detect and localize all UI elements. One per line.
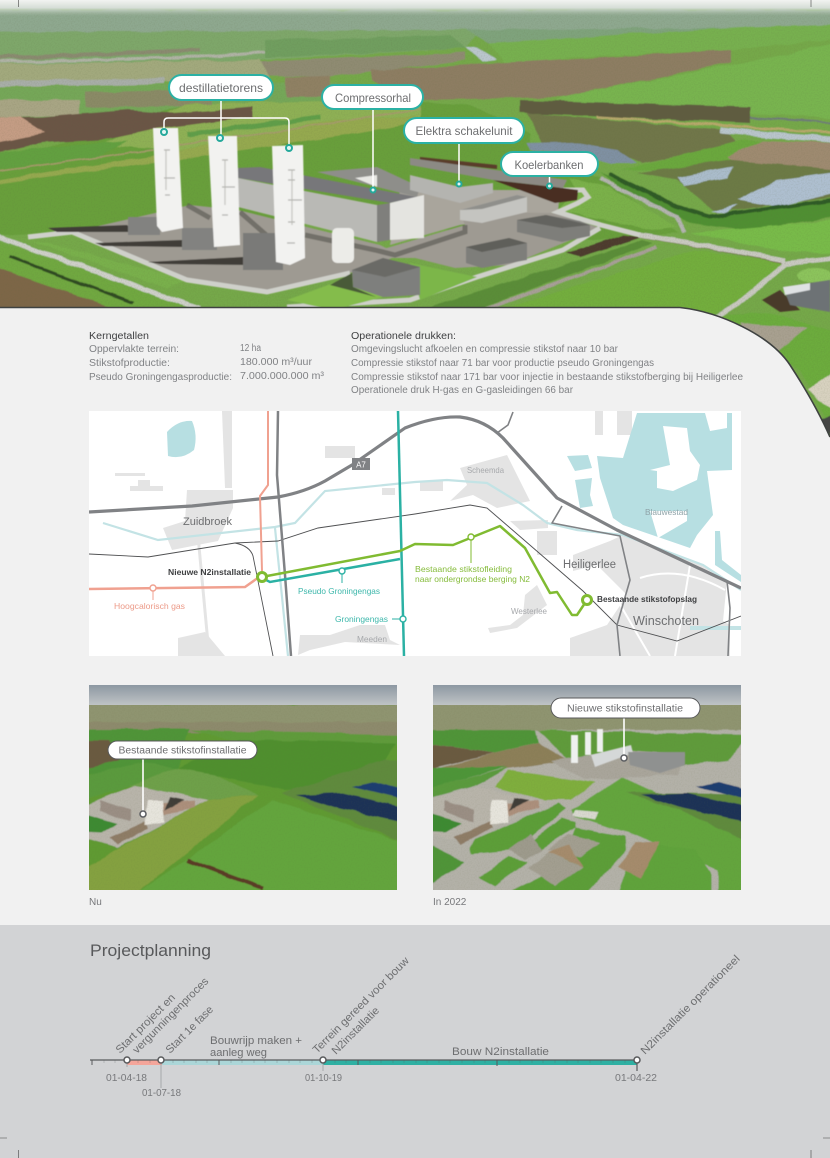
timeline milestone labels: N2installatie	[330, 1005, 382, 1057]
timeline phase labels	[210, 1035, 549, 1059]
map: labels	[114, 465, 699, 644]
callout: Nieuwe stikstofinstallatie	[551, 698, 700, 718]
timeline dates: 01-10-19	[305, 1072, 342, 1084]
photo grain	[0, 12, 830, 437]
timeline dates: 01-07-18	[142, 1087, 181, 1099]
route map	[89, 411, 741, 656]
timeline milestone labels: Terrein gereed voor bouw	[311, 955, 412, 1056]
text block: Operationele drukken: Operationele drukken:	[351, 331, 456, 342]
map: A7 sign	[352, 458, 370, 470]
site pavement	[72, 205, 400, 290]
text block: Kerngetallen: 180.000 m³/uur	[240, 357, 313, 368]
photo grain	[441, 731, 719, 888]
text block: Kerngetallen: Pseudo Groningengasproductie:	[89, 372, 232, 383]
map: labels: Pseudo Groningengas	[298, 586, 380, 596]
map: Hoogcalorisch gas line	[89, 411, 268, 600]
text block: Kerngetallen: Oppervlakte terrein:	[89, 344, 179, 355]
map: labels: Winschoten	[633, 613, 699, 628]
text block: Kerngetallen	[89, 331, 325, 383]
map: labels: Zuidbroek	[183, 516, 232, 528]
callout: Nieuwe stikstofinstallatie: Nieuwe stikstofinstallatie	[567, 704, 683, 714]
new plant in photo	[571, 729, 685, 773]
text block: Operationele drukken: Compressie stikstof naar 171 bar voor injectie in bestaande stikstofberging bij Heiligerlee	[351, 372, 743, 383]
aerial photo: plant site	[0, 0, 830, 445]
map: labels: Blauwestad	[645, 507, 688, 517]
map: labels: Meeden	[357, 634, 387, 644]
timeline milestone labels	[114, 953, 743, 1057]
map: labels: Westerlee	[511, 606, 547, 616]
label leaders on aerial photo	[164, 100, 550, 188]
callout: Bestaande stikstofinstallatie	[108, 741, 257, 759]
crop marks bottom	[0, 1138, 830, 1158]
text block: Kerngetallen: 12 ha	[240, 343, 261, 354]
map: water	[167, 413, 741, 582]
callout: Koelerbanken: Koelerbanken	[514, 158, 584, 172]
map: A7 sign: A7	[356, 460, 366, 470]
callout: Elektra schakelunit	[404, 118, 524, 143]
timeline milestone labels: Start project en	[114, 992, 178, 1056]
timeline bars	[90, 1060, 637, 1088]
map: stikstofleiding line	[258, 526, 592, 615]
map: labels: Groningengas	[335, 614, 388, 624]
text block: Operationele drukken: Compressie stikstof naar 71 bar voor productie pseudo Groningengas	[351, 358, 654, 369]
timeline phase labels: Bouwrijp maken +	[210, 1035, 302, 1047]
text block: Operationele drukken: Omgevingslucht afkoelen en compressie stikstof naar 10 bar	[351, 344, 619, 355]
callout: Elektra schakelunit: Elektra schakelunit	[416, 124, 513, 138]
timeline dates: 01-04-22	[615, 1072, 657, 1084]
map: labels: Scheemda	[467, 465, 504, 475]
map: built-up areas	[115, 411, 730, 656]
sky	[0, 0, 830, 16]
map: land inside the lake	[620, 413, 727, 656]
leader: new installation	[621, 718, 627, 761]
callout: destillatietorens	[169, 75, 273, 100]
map: labels: Nieuwe N2installatie	[168, 568, 252, 577]
marker dots on aerial photo	[161, 129, 552, 192]
timeline milestone labels: Start 1e fase	[164, 1004, 216, 1056]
caption: In 2022: In 2022	[433, 897, 467, 908]
callout: Bestaande stikstofinstallatie: Bestaande stikstofinstallatie	[118, 746, 247, 756]
text block: Kerngetallen: 7.000.000.000 m³	[240, 371, 325, 382]
map: railway	[89, 505, 741, 656]
photo: current situation	[80, 680, 406, 895]
timeline milestone labels: vergunningenproces	[131, 975, 212, 1056]
photo grain	[113, 796, 170, 832]
sky	[89, 685, 397, 705]
callout: Compressorhal: Compressorhal	[335, 91, 411, 105]
text block: Kerngetallen: Stikstofproductie:	[89, 358, 170, 369]
map: labels: Bestaande stikstofopslag	[597, 595, 697, 604]
timeline dates	[106, 1072, 657, 1099]
crop marks top	[18, 0, 811, 7]
leader: existing installation	[140, 759, 146, 817]
panel: project planning	[0, 925, 830, 1158]
callout: Koelerbanken	[501, 152, 598, 176]
map: labels: Hoogcalorisch gas	[114, 601, 185, 611]
map: canals	[103, 480, 741, 656]
map: labels: naar ondergrondse berging N2	[415, 574, 530, 584]
heading: Projectplanning: Projectplanning	[90, 941, 211, 960]
timeline milestones	[124, 1057, 640, 1063]
caption: Nu: Nu	[89, 897, 102, 908]
text block: Operationele drukken	[351, 331, 743, 396]
text block: Kerngetallen: Kerngetallen	[89, 331, 149, 342]
timeline phase labels: Bouw N2installatie	[452, 1046, 549, 1058]
photo: situation in 2022	[424, 680, 750, 895]
map: roads	[89, 411, 741, 656]
map: Pseudo Groningengas line	[262, 559, 400, 583]
map: labels: Heiligerlee	[563, 559, 616, 571]
timeline dates: 01-04-18	[106, 1072, 147, 1084]
callout: destillatietorens: destillatietorens	[179, 81, 263, 95]
timeline milestone labels: N2installatie operationeel	[639, 953, 743, 1057]
callout: Compressorhal	[322, 85, 423, 109]
timeline phase labels: aanleg weg	[210, 1047, 267, 1059]
map: labels: Bestaande stikstofleiding	[415, 564, 512, 574]
sky	[433, 685, 741, 705]
map: Groningengas line	[392, 411, 406, 656]
text block: Operationele drukken: Operationele druk H-gas en G-gasleidingen 66 bar	[351, 385, 574, 396]
